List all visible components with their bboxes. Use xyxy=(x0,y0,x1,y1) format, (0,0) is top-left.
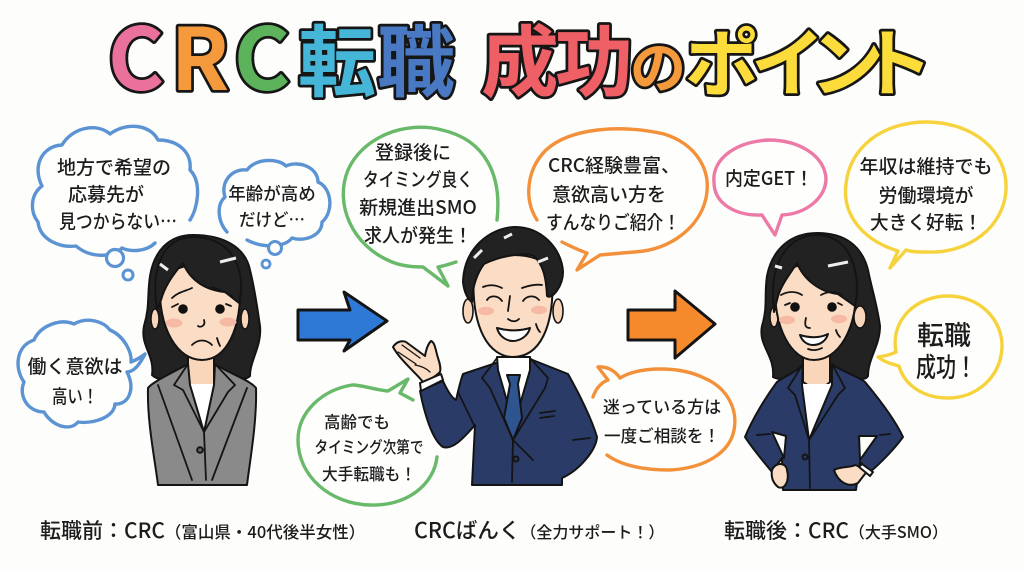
icon: hands on hips xyxy=(772,464,873,488)
thought bubble: no local openings xyxy=(32,126,198,280)
caption: before: 転職前：CRC（富山県・40代後半女性） xyxy=(40,515,365,545)
title: 転 xyxy=(298,1,376,113)
speech bubble: big company possible: 大手転職も！ xyxy=(322,461,416,485)
speech bubble: better working conditions: 年収は維持でも xyxy=(859,152,993,179)
person: advisor man xyxy=(393,227,597,485)
speech bubble: consult us xyxy=(593,367,735,470)
speech bubble: better working conditions: 労働環境が xyxy=(878,181,974,208)
speech bubble: success xyxy=(878,296,1002,398)
speech bubble: smooth introduction xyxy=(529,129,707,270)
speech bubble: new SMO job openings: 登録後に xyxy=(375,138,451,165)
speech bubble: high motivation xyxy=(18,320,145,427)
speech bubble: new SMO job openings xyxy=(343,127,498,286)
speech bubble: success: 成功！ xyxy=(916,346,976,385)
speech bubble: new SMO job openings: 求人が発生！ xyxy=(364,221,472,248)
speech bubble: big company possible: タイミング次第で xyxy=(314,434,424,458)
speech bubble: consult us: 一度ご相談を！ xyxy=(604,422,720,447)
thought bubble: no local openings: 見つからない… xyxy=(59,207,177,234)
arrow: orange xyxy=(628,291,715,358)
speech bubble: smooth introduction: すんなりご紹介！ xyxy=(546,208,680,235)
speech bubble: high motivation: 働く意欲は xyxy=(27,352,123,379)
title: の xyxy=(630,24,686,105)
speech bubble: success: 転職 xyxy=(917,314,971,353)
speech bubble: new SMO job openings: 新規進出SMO xyxy=(359,193,477,220)
speech bubble: better working conditions: 大きく好転！ xyxy=(870,208,982,235)
title: 功 xyxy=(555,1,633,113)
speech bubble: interview success xyxy=(714,140,826,235)
speech bubble: high motivation: 高い！ xyxy=(52,382,98,409)
speech bubble: better working conditions xyxy=(845,122,1006,268)
speech bubble: new SMO job openings: タイミング良く xyxy=(363,165,473,192)
thought bubble: age concern: だけど… xyxy=(239,207,305,232)
speech bubble: consult us: 迷っている方は xyxy=(603,393,721,418)
title: ト xyxy=(859,5,933,112)
title: 職 xyxy=(377,1,455,113)
thought bubble: age concern xyxy=(219,160,330,268)
caption: advisor: CRCばんく（全力サポート！） xyxy=(414,514,664,545)
speech bubble: smooth introduction: 意欲高い方を xyxy=(552,180,666,207)
speech bubble: smooth introduction: CRC経験豊富、 xyxy=(548,151,680,178)
thought bubble: no local openings: 応募先が xyxy=(68,180,144,207)
thought bubble: no local openings: 地方で希望の xyxy=(57,153,171,180)
speech bubble: big company possible xyxy=(298,379,437,505)
caption: after: 転職後：CRC（大手SMO） xyxy=(724,515,948,545)
thought bubble: age concern: 年齢が高め xyxy=(228,181,316,206)
title: イ xyxy=(751,5,825,112)
title: ン xyxy=(810,5,884,112)
title: ポ xyxy=(685,5,759,112)
person: woman after job change xyxy=(745,233,903,490)
title: 成 xyxy=(481,1,559,113)
arrow: blue xyxy=(298,292,387,351)
title xyxy=(108,0,933,115)
speech bubble: big company possible: 高齢でも xyxy=(324,409,390,433)
person: woman before job change xyxy=(143,235,260,485)
icon: raised open hand xyxy=(393,341,443,391)
speech bubble: interview success: 内定GET！ xyxy=(725,164,813,191)
